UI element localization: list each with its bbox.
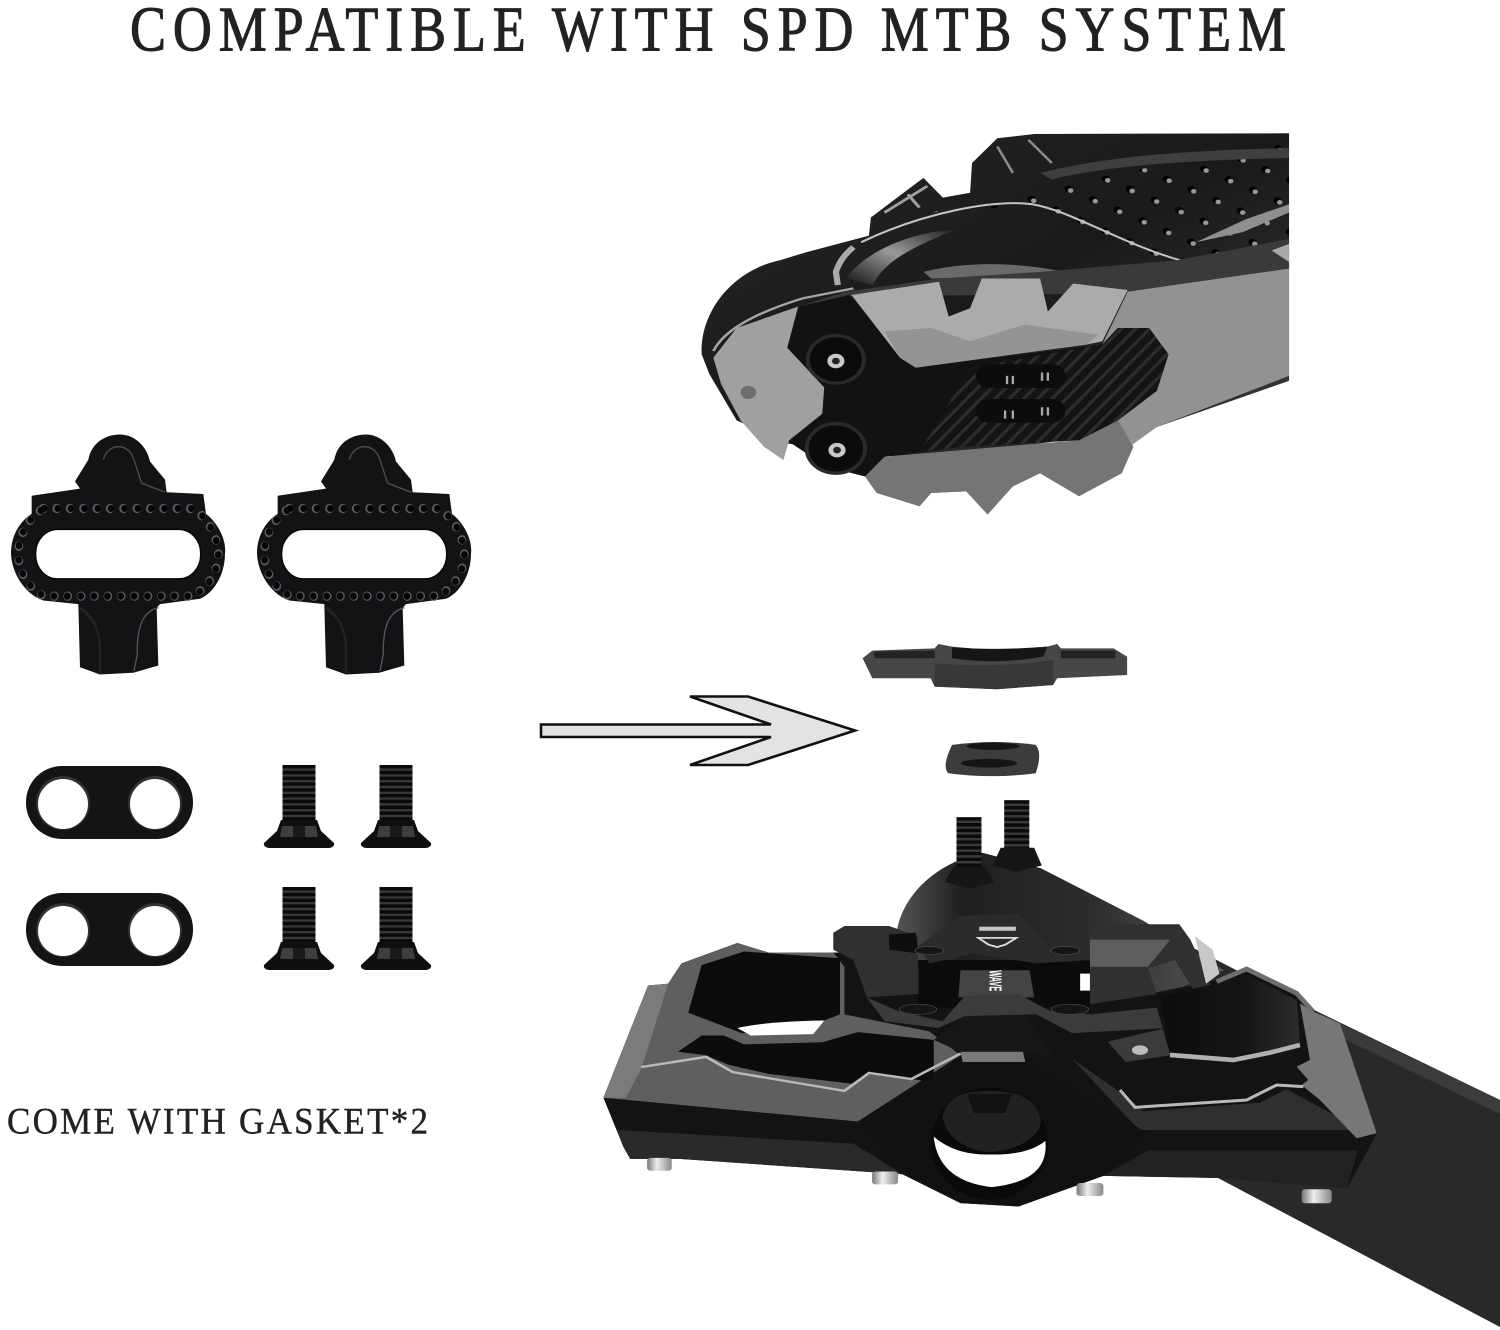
back dome [896, 853, 1224, 1001]
silver wedge [1195, 936, 1219, 984]
caption: COME WITH GASKET*2 [7, 1101, 428, 1142]
cleat front body [935, 660, 1053, 689]
lower side shade [617, 1130, 902, 1174]
shiny eyelet strip [1196, 204, 1289, 242]
lug shade [884, 325, 1098, 368]
lower left cutout [678, 1032, 934, 1084]
spacer slot upper [966, 743, 1019, 750]
cleat right wing top [1061, 651, 1115, 658]
axle nut [943, 1091, 1041, 1152]
centre label plate [961, 1052, 1025, 1062]
right textured face [1072, 1059, 1362, 1130]
pedal [603, 800, 1377, 1206]
cleat recess [952, 647, 1047, 661]
hex socket [967, 1094, 1012, 1113]
bolt upper right [361, 765, 431, 848]
right lower shade [1103, 1150, 1358, 1188]
cleat left [11, 434, 225, 675]
spring pin [1132, 1045, 1148, 1055]
perforations [933, 145, 1289, 256]
shoe [702, 133, 1289, 514]
spacer plate [946, 742, 1039, 776]
upper slot screws [1007, 373, 1048, 384]
pedal body silhouette [603, 943, 1377, 1206]
leather sheen [846, 229, 958, 285]
right low silver strip [1120, 1085, 1303, 1107]
silver edge left [641, 1054, 961, 1091]
right upper cutout [1160, 975, 1300, 1055]
logo mark [978, 938, 1016, 947]
left frame [603, 943, 961, 1122]
cleat right [257, 434, 471, 675]
brand plate [958, 970, 1034, 997]
clip right light face [1090, 940, 1170, 967]
toe pin [741, 386, 756, 399]
logo band [979, 927, 1016, 931]
axle hole [931, 1088, 1048, 1200]
arrow [541, 696, 855, 765]
upper cleat slot [976, 364, 1065, 388]
dark welt band [799, 239, 1289, 307]
shoe upper silhouette [702, 133, 1289, 460]
pin three [1077, 1183, 1103, 1196]
see-through window [737, 1021, 824, 1035]
crank ridge [1318, 1013, 1500, 1114]
brand text: WAVE [986, 970, 1005, 991]
buckle highlight [884, 186, 927, 212]
crank arm [1100, 900, 1500, 1327]
bolt lower left [264, 887, 334, 970]
stud lower [807, 424, 865, 473]
clip centre plate [918, 914, 1090, 963]
left thread bolt [945, 817, 994, 889]
clip right block [1090, 924, 1215, 1004]
left edge highlight [603, 984, 668, 1098]
clip centre gap [918, 960, 1090, 1008]
gasket lower [26, 893, 193, 966]
bolt lower right [361, 887, 431, 970]
right top strip [1217, 969, 1313, 1012]
centre diamond [858, 1059, 1148, 1206]
axle opening [934, 1137, 1046, 1187]
toe edge highlight [713, 288, 853, 351]
clip left tooth [889, 933, 918, 953]
right mid silver strip [1170, 1045, 1300, 1060]
cleat left wing top [874, 651, 935, 658]
pin two [872, 1171, 898, 1184]
gasket upper [26, 766, 193, 839]
top gloss band [1040, 148, 1289, 180]
carbon weave [920, 328, 1168, 452]
stud upper [808, 336, 864, 383]
toe sole piece [713, 307, 824, 460]
lower gloss streak [923, 264, 1079, 278]
clip left block [833, 926, 918, 997]
right pin [1302, 1189, 1332, 1203]
lower cleat slot [976, 399, 1065, 423]
upper buckle highlight [997, 140, 1052, 173]
right gray frame [1297, 1003, 1377, 1138]
right thread bolt [993, 800, 1042, 872]
sole lower shade [865, 420, 1133, 514]
bolt upper left [264, 765, 334, 848]
pin one [647, 1158, 672, 1171]
upper left cutout [688, 952, 840, 1033]
axle ridge [934, 1016, 1054, 1059]
main sole [865, 269, 1289, 514]
clip lower bar [867, 994, 1170, 1062]
white gap [1080, 974, 1090, 991]
lower slot screws [1005, 407, 1048, 419]
seam highlight [861, 203, 1180, 260]
clip screws [899, 946, 1089, 1014]
front lug block [851, 278, 1128, 368]
spacer slot lower [961, 759, 1017, 768]
black cleat plate [787, 295, 1168, 476]
strap loop [836, 247, 853, 285]
pedal right frame [1120, 969, 1377, 1203]
cleat side view [863, 644, 1127, 689]
sole chip [1272, 244, 1289, 262]
